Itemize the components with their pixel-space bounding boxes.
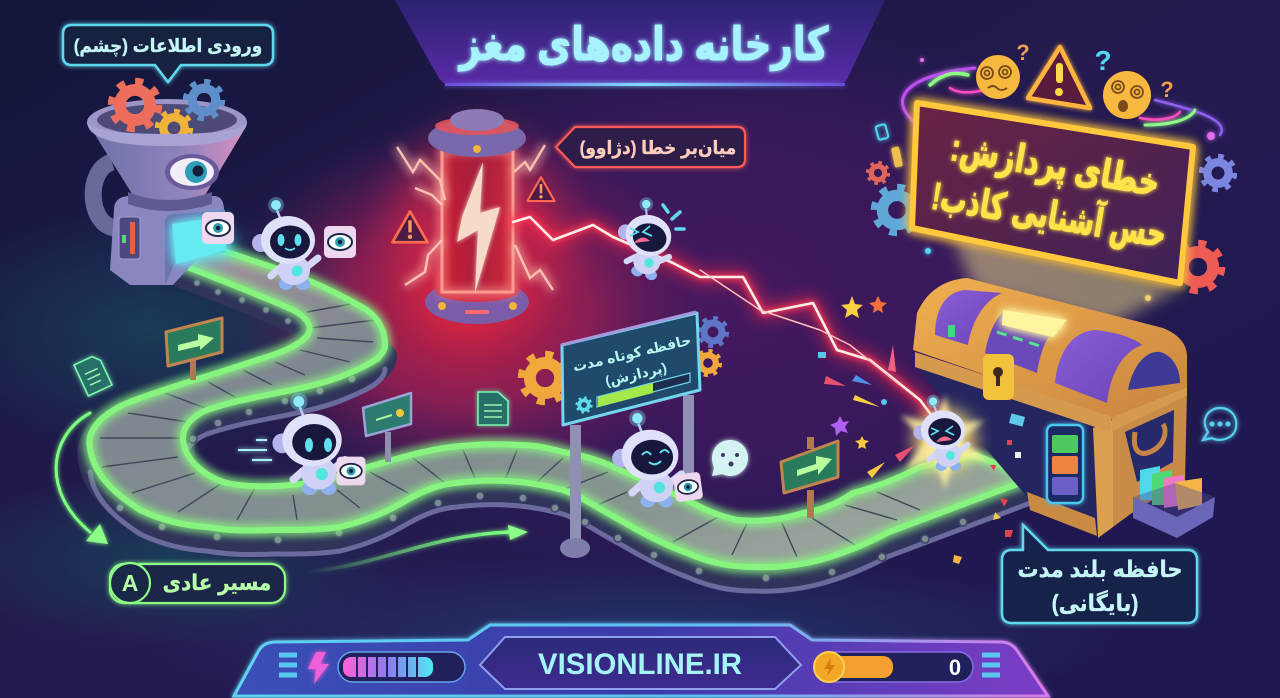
- panel gears: [1201, 156, 1235, 190]
- eye: [165, 154, 219, 190]
- warning icon right: [527, 177, 555, 201]
- chest front: [915, 365, 1097, 533]
- direction sign right: [781, 437, 838, 518]
- hose: [93, 162, 115, 228]
- chat icon right: [1203, 408, 1236, 440]
- question marks: ?: [1160, 77, 1174, 102]
- sign board: [562, 313, 700, 425]
- URL plate: VISIONLINE.IR: [538, 648, 742, 681]
- short-term memory sign: حافظه کوتاه مدت: [571, 332, 693, 376]
- neon green belt edges: [89, 250, 1033, 567]
- panel text: حس آشنایی کاذب!: [929, 172, 1170, 257]
- robot 1 with eye card: [252, 197, 356, 290]
- explosion robot: [900, 395, 990, 490]
- robot 4 happy: [612, 410, 703, 508]
- short-term memory sign: [521, 312, 727, 558]
- coin meter: 0: [949, 655, 961, 680]
- warning triangle: [1028, 47, 1090, 108]
- conveyor belt surface: [89, 250, 1033, 567]
- chest labels: [1047, 425, 1083, 503]
- left stripes: [279, 655, 297, 675]
- false familiarity error panel: [867, 40, 1235, 301]
- dizzy face right: [1103, 71, 1151, 119]
- sign posts: [570, 425, 581, 545]
- panel text: خطای پردازش:: [947, 126, 1163, 206]
- short-term memory sign: (پردازش): [604, 359, 668, 390]
- direction sign left: [166, 318, 222, 380]
- chest handle: [1134, 424, 1165, 453]
- machine door: [165, 210, 225, 285]
- mini sign: [363, 393, 411, 462]
- left meter: [338, 652, 465, 682]
- question marks: ?: [1094, 45, 1112, 76]
- label: normal path A: مسیر عادی: [163, 571, 271, 595]
- capsule sparks: [397, 145, 553, 290]
- question marks: ?: [1016, 40, 1030, 65]
- progress bar: [597, 373, 690, 407]
- panel frame: [912, 103, 1193, 283]
- red glow: [392, 130, 562, 330]
- eye card: [202, 212, 234, 244]
- label: normal path A: A: [122, 570, 138, 596]
- gears: [111, 81, 222, 145]
- chest lock: [983, 354, 1014, 400]
- capsule tube: [442, 150, 513, 292]
- callout text: ورودی اطلاعات (چشم): [74, 35, 262, 57]
- title banner: [395, 0, 885, 86]
- sign gears: [521, 354, 569, 402]
- dizzy face left: [976, 55, 1020, 99]
- right stripes: [982, 655, 1000, 675]
- light beam from chest: [950, 230, 1185, 325]
- floating bits: [875, 58, 1215, 301]
- chest corner pillar: [1093, 420, 1113, 538]
- chat bubble smile: [712, 440, 748, 476]
- left bolt: [308, 652, 329, 684]
- lid purple panels: [935, 290, 1002, 345]
- robot 3 with card: [238, 393, 365, 495]
- callout: long-term memory: (بایگانی): [1052, 589, 1138, 616]
- bottom status bar: [234, 625, 1048, 696]
- question marks: [1016, 40, 1174, 102]
- red lightning trail: [513, 217, 935, 420]
- callout: deja vu shortcut: [556, 127, 745, 167]
- capsule bolt: [457, 162, 500, 293]
- callout: long-term memory: [1002, 525, 1197, 623]
- chest base strip: [1027, 492, 1097, 536]
- base: [110, 196, 224, 285]
- document icon left: [74, 354, 112, 396]
- callout: input (eye): [63, 25, 273, 82]
- URL plate: [480, 637, 801, 689]
- chest drawer with folders: [1133, 466, 1215, 538]
- coin meter: [814, 652, 973, 682]
- conveyor side wall: [89, 274, 1033, 591]
- chest lid: [913, 278, 1187, 418]
- capsule cap: [428, 119, 526, 157]
- robot 2 crying: [608, 192, 684, 283]
- conveyor rivets: [116, 280, 967, 582]
- panel text: [929, 126, 1170, 257]
- document icon middle: [478, 392, 508, 425]
- confetti: [818, 296, 1025, 564]
- curved arrow bottom: [307, 525, 528, 572]
- chest glow window: [1002, 310, 1067, 337]
- curved arrow left: [56, 413, 108, 544]
- funnel rim back: [87, 99, 247, 145]
- capsule base: [425, 280, 529, 324]
- funnel cone: [92, 130, 244, 204]
- neon swirls: [902, 68, 1222, 135]
- title text: کارخانه داده‌های مغز: [458, 18, 829, 72]
- chest right side: [1113, 390, 1187, 527]
- callout text: حافظه بلند مدت: [1018, 556, 1182, 582]
- callout: deja vu shortcut: میان‌بر خطا (دژاوو): [580, 137, 736, 159]
- treasure chest long-term memory: [913, 278, 1215, 538]
- warning icon left: [392, 212, 428, 242]
- funnel machine: [87, 81, 247, 285]
- label: normal path A: [110, 563, 285, 603]
- lightning capsule: [397, 109, 553, 324]
